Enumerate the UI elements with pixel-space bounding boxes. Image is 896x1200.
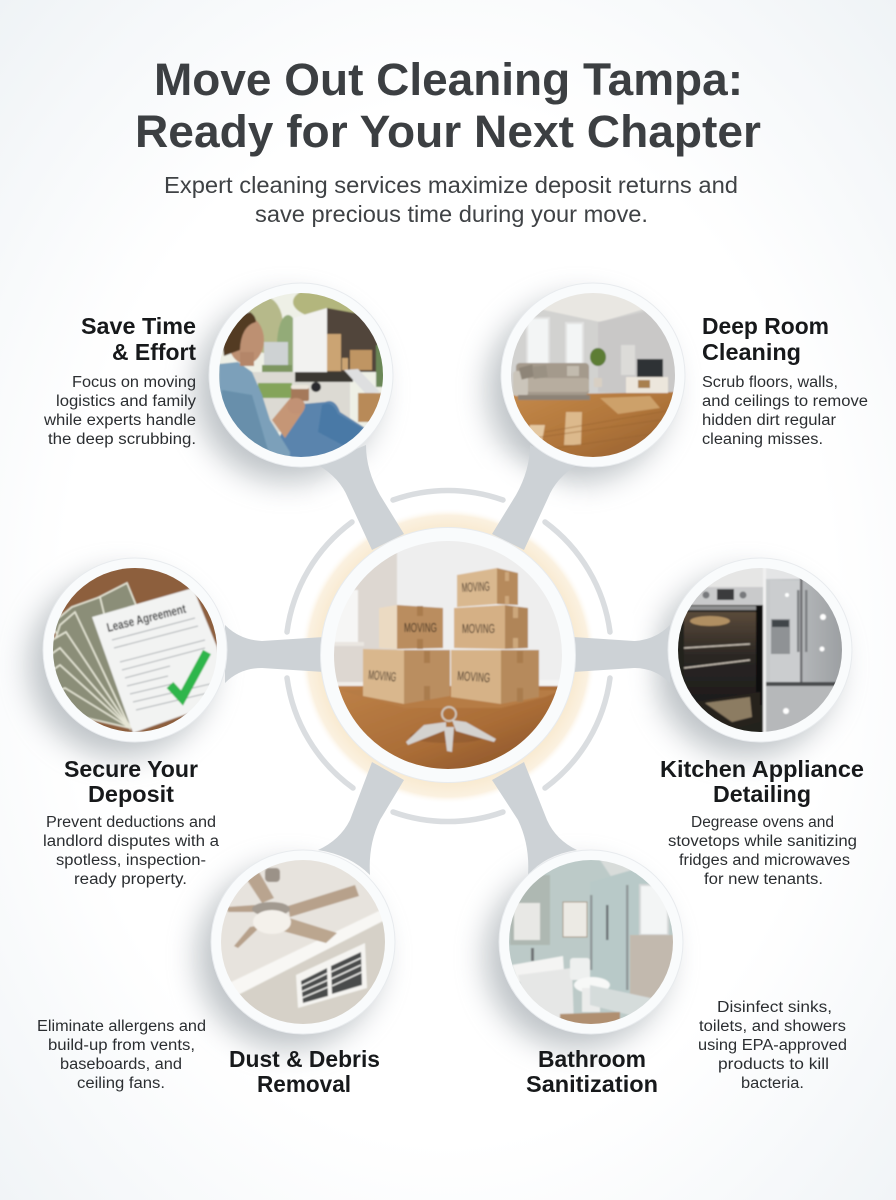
- heading: [526, 1046, 658, 1097]
- description: ceiling fans.: [77, 1075, 165, 1092]
- title: Ready for Your Next Chapter: [135, 106, 761, 157]
- heading: Save Time: [81, 313, 196, 339]
- title: [135, 54, 761, 157]
- heading: [229, 1046, 380, 1097]
- description: stovetops while sanitizing: [668, 833, 857, 850]
- panel: deep room cleaning: [501, 283, 868, 467]
- description: [37, 1018, 206, 1092]
- heading: Removal: [257, 1071, 351, 1097]
- circle shadows: [29, 298, 838, 1049]
- title: Move Out Cleaning Tampa:: [154, 54, 743, 105]
- description: logistics and family: [56, 393, 196, 410]
- description: Disinfect sinks,: [717, 999, 832, 1016]
- description: fridges and microwaves: [679, 852, 850, 869]
- description: build-up from vents,: [48, 1037, 195, 1054]
- description: ready property.: [74, 871, 187, 888]
- heading: Deposit: [88, 781, 174, 807]
- description: while experts handle: [43, 412, 196, 429]
- heading: Kitchen Appliance: [660, 756, 864, 782]
- photo: lease agreement with cash: [43, 558, 227, 742]
- heading: Cleaning: [702, 339, 801, 365]
- hub: moving boxes and keys photo: MOVING: [461, 579, 490, 595]
- description: Degrease ovens and: [691, 814, 834, 831]
- description: the deep scrubbing.: [48, 431, 196, 448]
- description: spotless, inspection-: [56, 852, 206, 869]
- description: [43, 814, 219, 888]
- white halo behind hub: [258, 465, 638, 845]
- description: and ceilings to remove: [702, 393, 868, 410]
- hub: moving boxes and keys photo: MOVING: [457, 668, 491, 685]
- description: products to kill: [718, 1056, 829, 1073]
- subtitle: [164, 172, 738, 227]
- description: baseboards, and: [60, 1056, 182, 1073]
- panel: secure your deposit: [43, 558, 227, 888]
- description: using EPA-approved: [698, 1037, 847, 1054]
- heading: [81, 313, 196, 365]
- description: toilets, and showers: [699, 1018, 846, 1035]
- panel: bathroom sanitization: [499, 850, 847, 1097]
- hub: moving boxes and keys photo: [320, 528, 576, 782]
- photo: lease agreement with cash: Lease Agreement: [105, 602, 188, 635]
- hub: moving boxes and keys photo: MOVING: [404, 620, 437, 635]
- photo: ceiling fan and vent: [211, 850, 395, 1034]
- heading: [702, 313, 829, 365]
- panel: save time and effort: [43, 283, 393, 467]
- photo: clean living room: [501, 283, 685, 467]
- heading: Bathroom: [538, 1046, 646, 1072]
- hub: moving boxes and keys photo: MOVING: [462, 621, 495, 636]
- description: Prevent deductions and: [46, 814, 216, 831]
- description: cleaning misses.: [702, 431, 823, 448]
- description: [702, 374, 868, 448]
- heading: Detailing: [713, 781, 811, 807]
- description: Focus on moving: [72, 374, 196, 391]
- subtitle: Expert cleaning services maximize deposit returns and: [164, 172, 738, 198]
- photo: oven and fridge: [668, 558, 852, 742]
- heading: Secure Your: [64, 756, 198, 782]
- heading: [64, 756, 198, 807]
- description: [43, 374, 196, 448]
- photo: man with coffee and moving truck: [209, 283, 393, 467]
- panel: kitchen appliance detailing: [660, 558, 864, 888]
- hub: moving boxes and keys photo: MOVING: [368, 667, 397, 684]
- heading: [660, 756, 864, 807]
- heading: Dust & Debris: [229, 1046, 380, 1072]
- description: landlord disputes with a: [43, 833, 219, 850]
- heading: Deep Room: [702, 313, 829, 339]
- hub orbit arcs: [287, 490, 610, 822]
- photo: modern bathroom: [499, 850, 683, 1034]
- description: [668, 814, 857, 888]
- description: for new tenants.: [704, 871, 823, 888]
- description: [698, 999, 847, 1092]
- subtitle: save precious time during your move.: [255, 201, 648, 227]
- hub glow ring: [300, 508, 596, 804]
- description: Scrub floors, walls,: [702, 374, 838, 391]
- description: Eliminate allergens and: [37, 1018, 206, 1035]
- description: hidden dirt regular: [702, 412, 836, 429]
- connectors: [225, 445, 670, 875]
- heading: Sanitization: [526, 1071, 658, 1097]
- panel: dust and debris removal: [37, 850, 395, 1097]
- description: bacteria.: [741, 1075, 804, 1092]
- heading: & Effort: [112, 339, 196, 365]
